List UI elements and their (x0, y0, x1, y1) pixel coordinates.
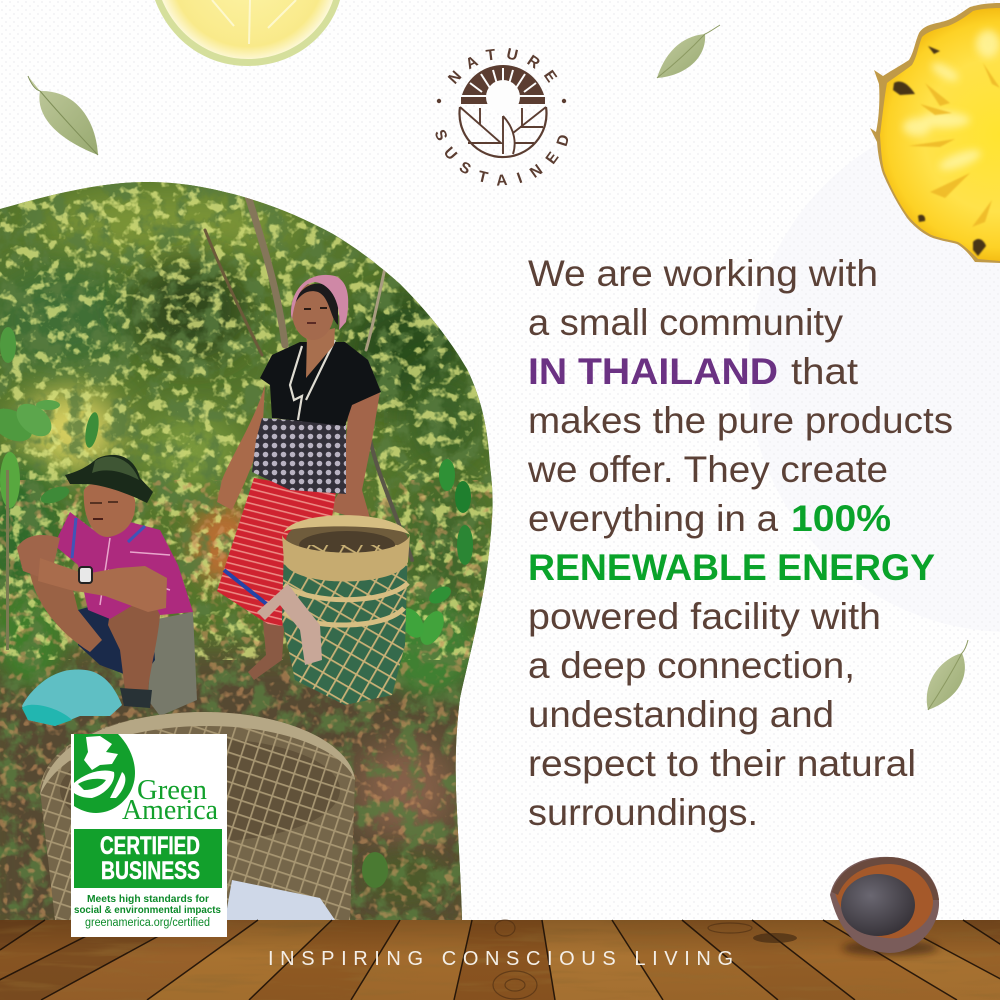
grey bag (148, 612, 197, 716)
watch (79, 567, 92, 583)
pineapple pale flesh (903, 30, 1000, 174)
black shirt (260, 342, 381, 426)
highlight: in Thailand: IN THAILAND (528, 351, 778, 392)
leaf: right side (927, 640, 968, 710)
badge: Green America certified business (71, 734, 227, 937)
badge wordmark (122, 774, 218, 826)
globe emblem (74, 734, 135, 813)
plastic bags (22, 669, 122, 726)
logo curved lettering: SUSTAINED (436, 130, 568, 186)
plank seams (0, 920, 1000, 1000)
man legs (30, 573, 102, 652)
logo curved lettering: NATURE (448, 48, 558, 84)
foreground empty basket (40, 712, 355, 920)
magenta shirt (54, 512, 193, 619)
hat (65, 455, 153, 503)
main paragraph: powered facility with (528, 596, 881, 637)
badge caption (74, 893, 221, 929)
tree trunks (205, 196, 412, 560)
necklace (290, 340, 335, 420)
highlight: 100% renewable energy (528, 498, 935, 588)
main paragraph: undestanding and (528, 694, 834, 735)
badge wordmark: Green (137, 774, 207, 806)
certified box: CERTIFIED (100, 832, 200, 860)
hair (294, 284, 338, 325)
highlight: 100% renewable energy: 100% (791, 498, 891, 539)
main paragraph: everything in a (528, 498, 778, 539)
main paragraph: makes the pure products (528, 400, 953, 441)
broad leaves at left (0, 327, 101, 650)
main paragraph: surroundings. (528, 792, 758, 833)
head scarf (291, 275, 348, 330)
pineapple slits (908, 63, 1000, 227)
woman arms (217, 385, 265, 510)
woman legs (248, 621, 284, 680)
man crouching (17, 455, 197, 726)
main paragraph: that (791, 351, 859, 392)
woman head (292, 284, 334, 340)
leaf: upper left (28, 76, 98, 155)
eyes and mouth (304, 308, 327, 309)
pineapple dark eyes (893, 46, 986, 256)
main paragraph: We are working with (528, 253, 878, 294)
fruit: pineapple slice (870, 3, 1000, 263)
badge caption: Meets high standards for (87, 893, 209, 905)
highlight: 100% renewable energy: RENEWABLE ENERGY (528, 547, 935, 588)
man arms (17, 535, 60, 578)
woman with basket (217, 275, 381, 680)
photo: farmers in the forest (0, 180, 500, 940)
right side leaves (362, 459, 473, 888)
patterned blouse band (252, 418, 346, 494)
certified box: BUSINESS (101, 857, 200, 885)
fruit: lemon slice (155, 0, 340, 66)
fruit: halved seed pod (830, 857, 939, 956)
neck (306, 328, 335, 378)
main paragraph (527, 253, 953, 833)
leaf: top centre (657, 25, 720, 78)
man head (84, 482, 135, 537)
sandals (120, 688, 152, 708)
wood grain (0, 920, 1000, 1000)
logo: Nature Sustained (436, 48, 568, 186)
lemon segments (212, 0, 296, 44)
upright basket (257, 515, 410, 705)
wood planks (0, 920, 1000, 1000)
cloth on basket (257, 584, 322, 665)
wood knots (493, 920, 797, 999)
wood floor (0, 920, 1000, 1000)
main paragraph: a deep connection, (528, 645, 855, 686)
badge wordmark: America (122, 794, 218, 826)
logo emblem (460, 65, 546, 157)
certified box (74, 829, 222, 888)
red skirt (217, 478, 336, 626)
seed (841, 874, 915, 936)
logo curved lettering (436, 48, 568, 186)
badge caption: social & environmental impacts (74, 904, 221, 916)
badge caption: greenamerica.org/certified (85, 917, 210, 929)
foliage texture (0, 180, 500, 920)
forest light and shade (0, 190, 485, 940)
main paragraph: respect to their natural (528, 743, 916, 784)
tagline: INSPIRING CONSCIOUS LIVING (268, 948, 733, 970)
main paragraph: we offer. They create (527, 449, 888, 490)
shorts (78, 608, 155, 674)
main paragraph: a small community (528, 302, 844, 343)
